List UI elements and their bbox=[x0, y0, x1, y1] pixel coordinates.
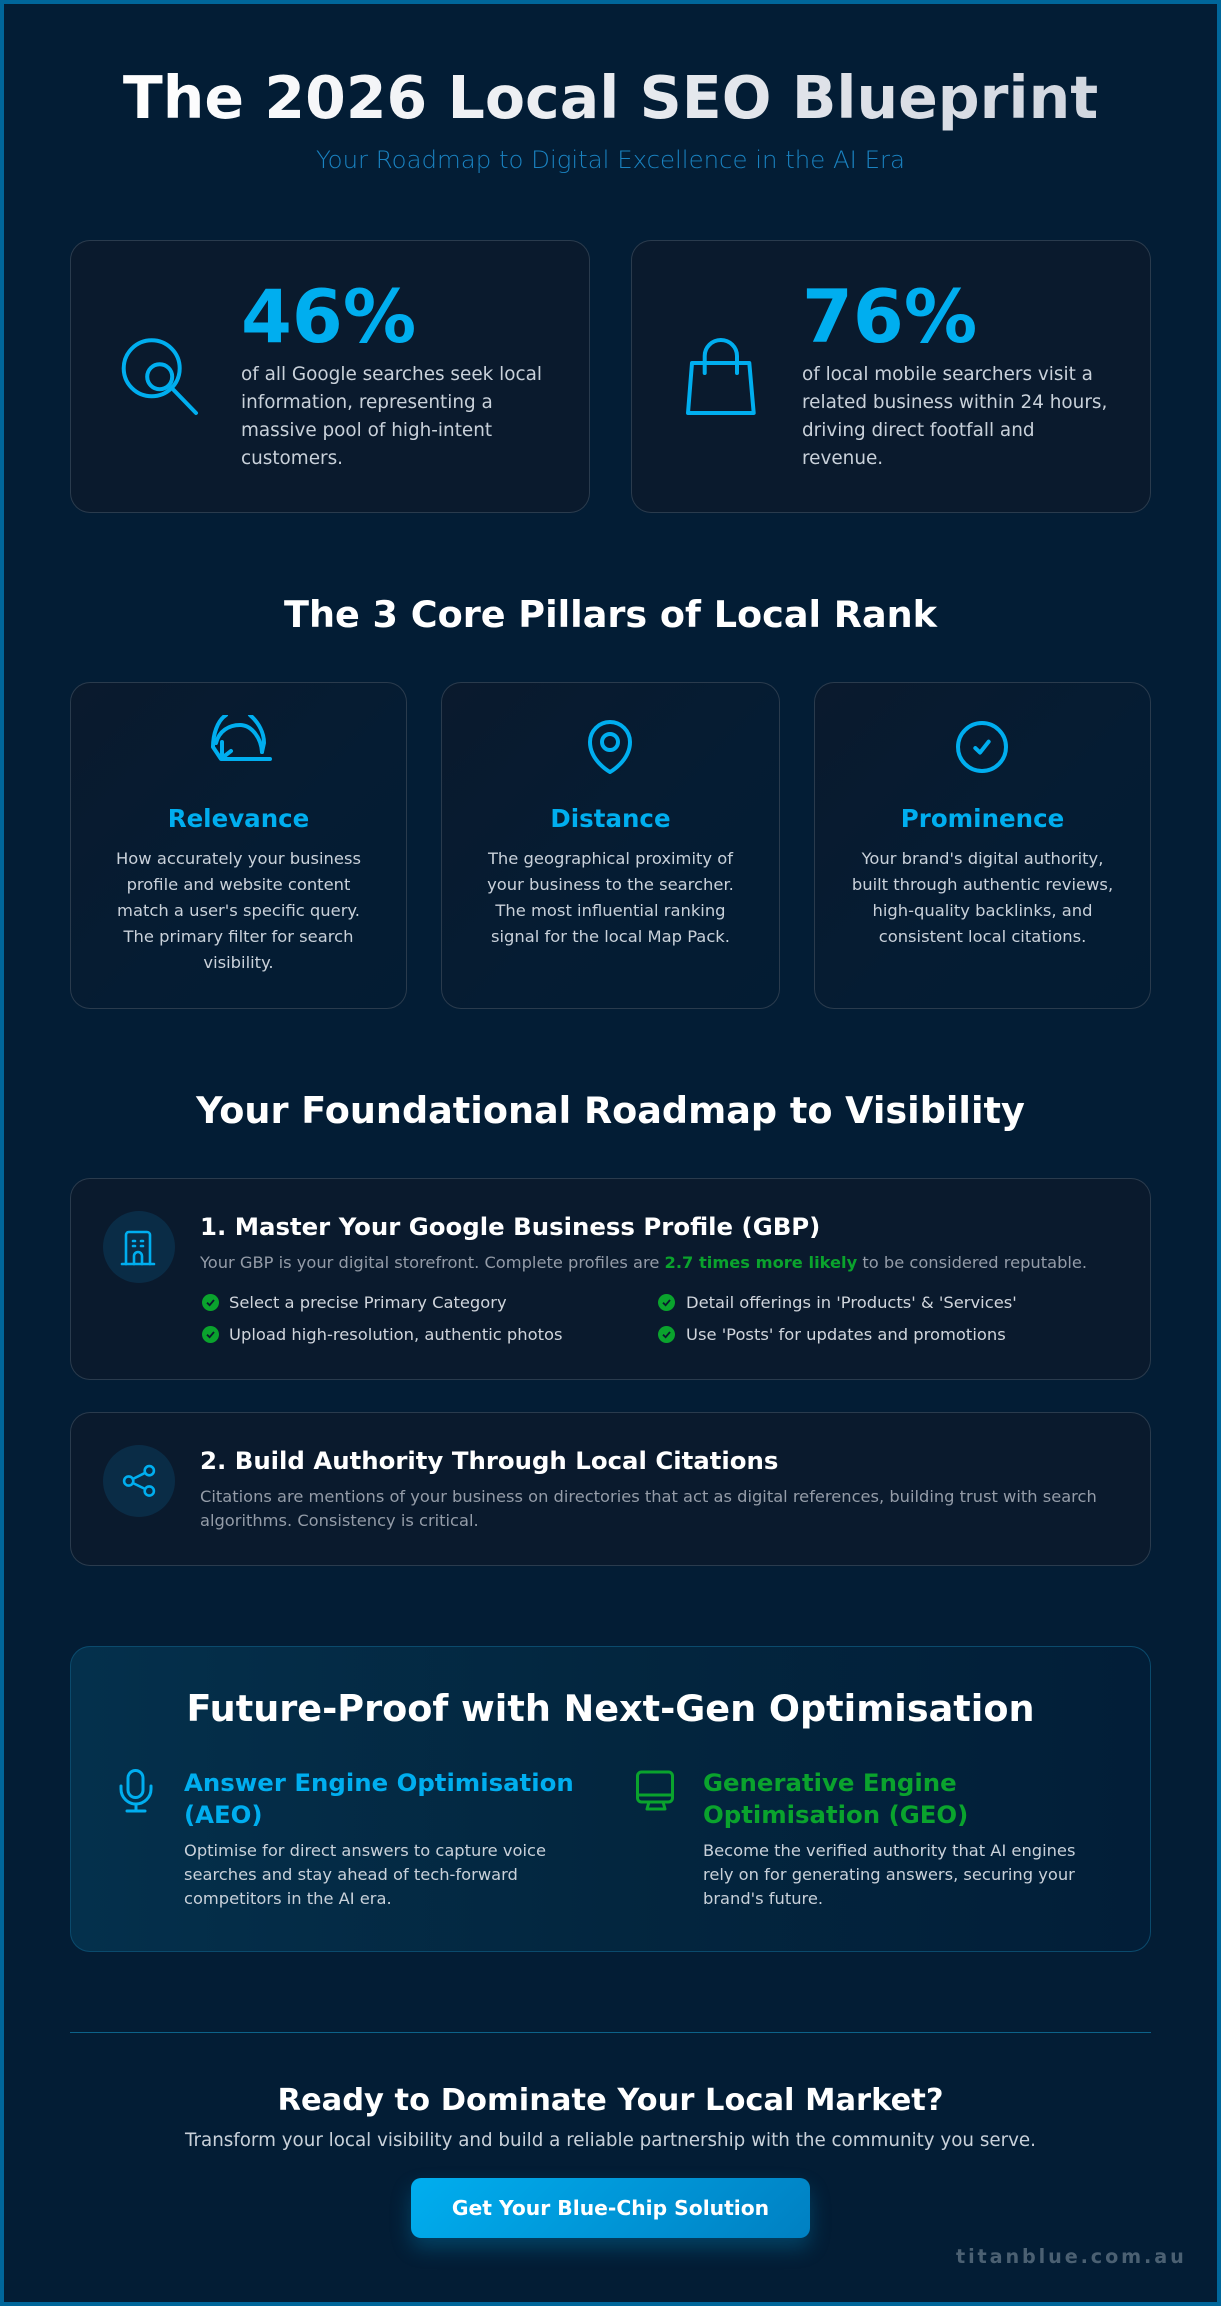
item: Detail offerings in 'Products' & 'Services' bbox=[686, 1293, 1017, 1312]
GEO title: Generative Engine bbox=[703, 1768, 957, 1797]
icon: relevance bbox=[211, 715, 272, 761]
step description: Citations are mentions of your business on directories that act as digital references, building trust with search bbox=[200, 1487, 1097, 1506]
stat description: customers. bbox=[241, 448, 343, 469]
heading: roadmap: Your Foundational Roadmap to Visibility bbox=[196, 1089, 1025, 1132]
stat description: revenue. bbox=[802, 448, 883, 469]
panel: stat 76% bbox=[631, 240, 1151, 513]
GEO text: brand's future. bbox=[703, 1889, 823, 1908]
icon: map pin bbox=[588, 720, 632, 774]
subtitle: Your Roadmap to Digital Excellence in the AI Era bbox=[316, 145, 905, 174]
icon: building bbox=[103, 1211, 175, 1283]
pillar text: your business to the searcher. bbox=[487, 875, 734, 894]
panel: distance bbox=[441, 682, 780, 1009]
AEO title: (AEO) bbox=[184, 1800, 263, 1829]
GEO title: Optimisation (GEO) bbox=[703, 1800, 968, 1829]
pillar text: The primary filter for search bbox=[124, 927, 353, 946]
panel: stat 46% bbox=[70, 240, 590, 513]
panel: next-gen optimisation bbox=[70, 1646, 1151, 1952]
CTA heading: Ready to Dominate Your Local Market? bbox=[277, 2083, 944, 2118]
heading: future-proof: Future-Proof with Next-Gen Optimisation bbox=[186, 1687, 1034, 1730]
pillar title: Relevance bbox=[168, 804, 309, 833]
stat number: 46% bbox=[241, 275, 416, 360]
AEO text: competitors in the AI era. bbox=[184, 1889, 392, 1908]
AEO text bbox=[184, 1841, 546, 1908]
GEO text bbox=[703, 1841, 1075, 1908]
pillar text: visibility. bbox=[203, 953, 274, 972]
item: Upload high-resolution, authentic photos bbox=[229, 1325, 563, 1344]
AEO text: Optimise for direct answers to capture voice bbox=[184, 1841, 546, 1860]
pillar text: high-quality backlinks, and bbox=[872, 901, 1093, 920]
step description: algorithms. Consistency is critical. bbox=[200, 1511, 479, 1530]
step title: 2. Build Authority Through Local Citations bbox=[200, 1446, 778, 1475]
pillar text: The most influential ranking bbox=[495, 901, 726, 920]
AEO title: Answer Engine Optimisation bbox=[184, 1768, 574, 1797]
CTA button bbox=[411, 2178, 810, 2238]
title: The 2026 Local SEO Blueprint bbox=[123, 64, 1098, 132]
stat number: 76% bbox=[802, 275, 977, 360]
GEO text: rely on for generating answers, securing your bbox=[703, 1865, 1075, 1884]
icon: monitor bbox=[636, 1770, 674, 1810]
checklist bbox=[202, 1293, 1017, 1344]
stat description: of local mobile searchers visit a bbox=[802, 364, 1093, 385]
stat description bbox=[241, 364, 542, 469]
pillar text: signal for the local Map Pack. bbox=[491, 927, 730, 946]
icon: check circle bbox=[956, 721, 1008, 773]
stat description: related business within 24 hours, bbox=[802, 392, 1107, 413]
icon: magnifying glass bbox=[122, 338, 198, 416]
heading: pillars: The 3 Core Pillars of Local Rank bbox=[284, 593, 937, 636]
panel: step 1 GBP bbox=[70, 1178, 1151, 1380]
panel: step 2 citations bbox=[70, 1412, 1151, 1566]
pillar text: built through authentic reviews, bbox=[852, 875, 1113, 894]
stat description: of all Google searches seek local bbox=[241, 364, 542, 385]
pillar text: How accurately your business bbox=[116, 849, 361, 868]
step description bbox=[200, 1487, 1097, 1530]
pillar title: Distance bbox=[550, 804, 671, 833]
stat description: information, representing a bbox=[241, 392, 493, 413]
AEO title bbox=[184, 1768, 574, 1829]
stat description: massive pool of high-intent bbox=[241, 420, 492, 441]
step description: Your GBP is your digital storefront. Complete profiles are 2.7 times more likely to be considered reputable. bbox=[200, 1253, 1087, 1272]
GEO title bbox=[703, 1768, 968, 1829]
item: Use 'Posts' for updates and promotions bbox=[686, 1325, 1006, 1344]
stat description bbox=[802, 364, 1107, 469]
icon: share bbox=[103, 1445, 175, 1517]
pillar text bbox=[852, 849, 1113, 946]
stat description: driving direct footfall and bbox=[802, 420, 1035, 441]
CTA text: Transform your local visibility and build a reliable partnership with the community you serve. bbox=[185, 2130, 1036, 2151]
item: Select a precise Primary Category bbox=[229, 1293, 507, 1312]
pillar text bbox=[487, 849, 734, 946]
pillar title: Prominence bbox=[901, 804, 1064, 833]
pillar text bbox=[116, 849, 361, 972]
CTA button: Get Your Blue-Chip Solution bbox=[452, 2196, 769, 2220]
pillar text: The geographical proximity of bbox=[488, 849, 733, 868]
pillar text: profile and website content bbox=[127, 875, 350, 894]
pillar text: match a user's specific query. bbox=[117, 901, 360, 920]
panel: prominence bbox=[814, 682, 1151, 1009]
panel: relevance bbox=[70, 682, 407, 1009]
pillar text: consistent local citations. bbox=[879, 927, 1086, 946]
GEO text: Become the verified authority that AI engines bbox=[703, 1841, 1075, 1860]
icon: shopping bag bbox=[686, 338, 756, 415]
icon: microphone bbox=[120, 1769, 152, 1812]
brand watermark: titanblue.com.au bbox=[956, 2245, 1187, 2268]
AEO text: searches and stay ahead of tech-forward bbox=[184, 1865, 518, 1884]
pillar text: Your brand's digital authority, bbox=[862, 849, 1103, 868]
step title: 1. Master Your Google Business Profile (GBP) bbox=[200, 1212, 820, 1241]
